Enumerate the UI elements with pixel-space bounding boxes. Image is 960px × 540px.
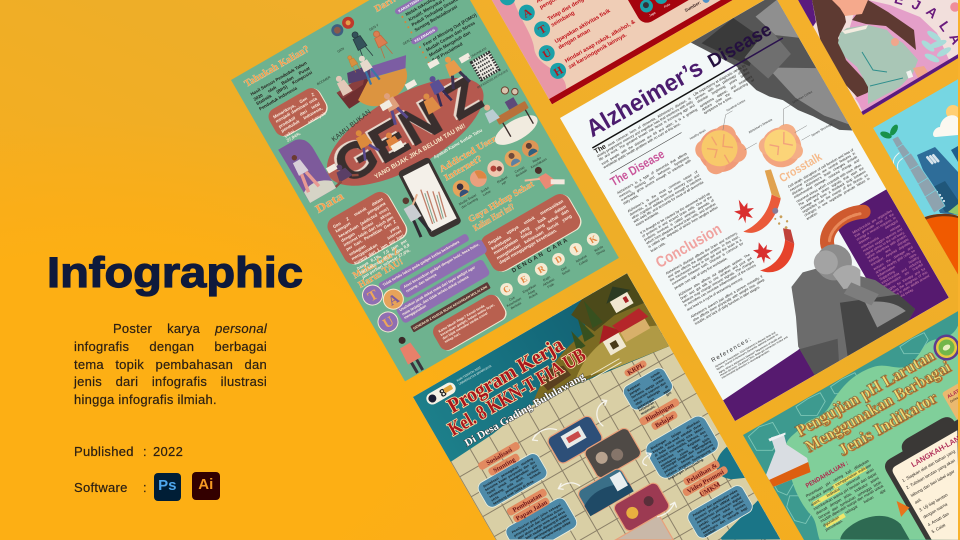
main ellipse — [311, 57, 499, 207]
text: box Sosialisasi: Sosialisasi pencegahan stunting bersama kader posyandu dan ibu hamil untuk mengenalkan gizi seimbang, pola asuh, sanitasi, serta pemantauan tumbuh kembang anak balita di desa. — [482, 457, 542, 506]
text: disease column — [616, 152, 719, 253]
text: pendahuluan: Penentuan pH sering kali dilakukan indikator dengan menggunakan indikator alami. Indikator universal akan memberikan warna pH larutan dan dapat diamati dengan jelas. Indikator alami berasal dari tumbuhan sehingga lebih mudah diperoleh warga dan murah untuk digunakan sebagai bahan ajar percobaan. — [805, 458, 887, 532]
text: conclusion column — [665, 231, 765, 326]
CERDIK circles: E — [519, 273, 529, 285]
building rear — [951, 146, 958, 162]
tag: kelemahan — [410, 25, 439, 45]
phone with chart — [397, 156, 462, 238]
CERDIK labels: Cek — [508, 295, 516, 302]
text: conclusion column: Alzheimer's doesn't just affect a person mentally, it also affects them physically with weight loss, sleep trouble, and lack of daily function in later stages. — [690, 274, 765, 326]
CERDIK labels: Cukup — [578, 258, 589, 266]
blue boxes — [470, 360, 757, 540]
heading: The Disease: The Disease — [608, 147, 667, 189]
poster content — [413, 274, 780, 540]
bottom strip — [861, 53, 960, 118]
software row: : — [143, 480, 147, 495]
icon circles — [450, 137, 542, 200]
list text: Self Proclaimed — [431, 41, 464, 63]
org label: KKN-TEMATIK 2022 — [456, 365, 482, 383]
box text: Pembuatan: persimpangan utama desa — [533, 517, 570, 540]
text: intro: Hasil Sensus Penduduk Tahun 2020 oleh Badan Pusat Statistik (BPS) Komposisi Penduduk Indonesia — [250, 60, 313, 111]
list text: Senang Berkolaborasi — [414, 4, 458, 33]
neuron healthy — [722, 168, 795, 238]
title: Infographic — [47, 250, 303, 297]
flame — [896, 501, 910, 517]
person with phone — [394, 333, 427, 375]
title: Jenis Indikator — [834, 388, 940, 460]
logo — [934, 334, 958, 360]
person at phone — [399, 191, 437, 238]
pie labels: BOOMER — [316, 75, 332, 86]
heading: Data: Data — [314, 190, 346, 216]
icon labels: Radiasi — [496, 175, 508, 184]
letters: gejala: A — [923, 3, 941, 22]
poster artwork — [492, 0, 732, 104]
heading: Tahukah Kalian: Tahukah Kalian? — [243, 44, 311, 90]
CERDIK circles: K — [588, 233, 599, 245]
text: purple panel: Mitochondria are organelles that generate most of the energy a neuron requires. In disease, damaged mitochondria release reactive oxygen species and signal stress to the cell body, which interferes with protein folding and disrupts transport. Amyloid deposits worsen the damage and activate nearby glial cells, so inflammation rises. Supporting healthy mitochondria and reducing inflammation are hopeful targets for therapy and for slowing the progress of this illness in older adults around the world today. — [852, 209, 930, 303]
scattered particles — [769, 205, 791, 232]
sun — [946, 105, 960, 119]
brain labels: Shrunken Cortex — [791, 89, 813, 104]
building main — [917, 147, 958, 215]
published row: 2022 — [153, 444, 183, 459]
heading: pendahuluan: PENDAHULUAN : — [805, 460, 850, 490]
box text: Pembuatan: Pembuatan papan jalan sebagai — [511, 503, 562, 534]
steps list — [902, 450, 956, 533]
hills — [532, 274, 669, 404]
pie labels: GEN Y — [368, 23, 380, 32]
body paragraph: infografis dengan berbagai — [74, 339, 267, 354]
body top — [838, 25, 918, 104]
TAU circles: T — [365, 287, 382, 305]
published row — [74, 444, 183, 459]
icon labels: Cemas — [514, 165, 525, 174]
highlights — [812, 466, 867, 528]
icon labels: HP — [501, 180, 508, 186]
poster content — [744, 314, 960, 540]
icon labels: Media Sosial — [458, 193, 477, 206]
body paragraph: jenis dari infografis ilustrasi — [74, 374, 267, 389]
pink wave — [488, 0, 570, 99]
icon: Illustrator — [192, 472, 220, 500]
action list: dengan aman — [557, 27, 592, 51]
list text: Mudah Mengeluh dan — [428, 30, 471, 58]
text: callout: Kamu Masih Ragu? Kenali tanda kecanduan gadget, batasi waktu layar, dan bijak memakai media sosial setiap hari. — [438, 303, 495, 344]
heading: addicted — [437, 133, 503, 183]
poster artwork — [582, 0, 949, 421]
salmon tags — [478, 360, 728, 522]
subtitle: Di Desa Gading Bululawang — [463, 371, 588, 449]
panel labels: Jaga — [648, 11, 657, 18]
steps list: 4. Amati dan — [927, 511, 950, 527]
speech bubbles — [306, 43, 486, 174]
text: lifestyle pill: Segala upaya untuk memastikan kehidupan yang baik dalam menciptakan hidup yang sehat dan menghindari kebiasaan buruk yang dapat mengganggu kesehatan. — [487, 199, 572, 265]
text: box KRPL: Kegiatan rumah pangan lestari bersama warga untuk menanam sayuran dan obat keluarga di pekarangan agar kebutuhan gizi terpenuhi. — [627, 371, 672, 416]
lifestyle pill — [477, 190, 585, 276]
chimney — [892, 136, 945, 213]
poster: Gen Z green — [231, 0, 619, 381]
pie chart — [331, 43, 422, 122]
title: Disease — [704, 19, 776, 72]
tag labels: Sosialisasi — [485, 447, 514, 467]
title: Menggunakan Berbagai — [801, 357, 954, 456]
tag labels: Bimbingan — [645, 402, 675, 423]
tag labels — [486, 363, 724, 521]
red panel — [615, 0, 755, 26]
TAUH circles: T — [536, 23, 549, 37]
icon labels — [458, 154, 548, 210]
body paragraph: tema topik pembahasan dan — [74, 357, 267, 372]
title: Kel. 8 KKN-T FIA UB — [444, 344, 590, 441]
subtitle: YANG BIJAK JIKA BELUM TAU INI! — [373, 123, 467, 181]
logo pill — [426, 382, 456, 404]
steps list: 3. Uji tiap larutan — [918, 492, 949, 513]
hexagon pattern — [748, 332, 928, 524]
text: disease column: It is thought to be caused by the abnormal build-up of proteins in and around brain cells. One of the proteins involved is called amyloid, deposits of which form plaques around brain cells, and another is called tau, deposits of which form tangles within brain cells. — [639, 191, 719, 253]
TAUH circles: U — [541, 47, 554, 61]
teal corner — [716, 446, 780, 540]
tag labels: Belajar — [654, 413, 676, 430]
TAU circles: U — [381, 314, 397, 332]
icon: Photoshop — [154, 473, 181, 500]
steps list: dengan warna — [922, 501, 949, 520]
sleeve lines — [862, 52, 903, 86]
torn photo — [691, 0, 852, 178]
skirt — [855, 93, 867, 108]
list text: Fear of Missing Out (FOMO) — [422, 12, 478, 47]
purple bars — [378, 228, 499, 326]
TAU circles — [359, 273, 416, 336]
QR labels: REFERENSI AKTIVITAS — [476, 69, 509, 90]
heading: maka gen z: Harus TAU! — [357, 257, 405, 291]
steps list: 1. Siapkan alat dan bahan yang — [901, 448, 956, 483]
brain labels: Alzheimer's Disease — [748, 117, 773, 134]
man overlay — [792, 244, 915, 375]
icon labels: Berlebih — [515, 168, 528, 178]
leaves — [879, 123, 900, 140]
right edge strip — [958, 0, 960, 540]
brain labels: Severe Shrinkage — [810, 122, 833, 137]
CERDIK labels: Enyahkan — [522, 283, 537, 294]
flask — [766, 432, 811, 487]
text: box Pelatihan: Pelatihan dan pembuatan video promosi produk UMKM untuk memperluas pemasaran digital pelaku usaha lokal melalui media sosial dengan konten sederhana dan menarik bagi pembeli. — [692, 489, 748, 538]
poster paper — [743, 310, 960, 540]
body paragraph: Poster karya personal — [113, 321, 267, 336]
heading: References: References: — [711, 336, 753, 364]
text: box Bimbingan: Bimbingan belajar diberikan kepada anak-anak sekolah dasar di balai desa setiap sore. Materi meliputi matematika, bahasa, dan kreativitas seni. Kegiatan ini membantu siswa agar lebih semangat belajar dan mengulang pelajaran bersama mahasiswa selama program berlangsung di lingkungan Desa Gading. — [650, 419, 716, 481]
text: data pill: Gen Z masuk dalam kategori pengguna kecanduan (addicted user) dengan durasi akses internet lebih dari tujuh jam per hari. Penelitian Gen Z sebagian yang menggunakan internet kurang dari 1 jam per hari hanya 8,1%, 7,5 jam per hari sebesar 30,7%, dan 8,9 jam perhari sebesar 27,6%. — [332, 196, 411, 280]
CERDIK labels: Kesehatan — [506, 296, 522, 308]
smoke lines — [893, 152, 906, 170]
fence — [591, 359, 621, 379]
orange mound — [923, 214, 958, 275]
title: Pengujian pH Larutan — [792, 345, 938, 440]
sky — [873, 78, 960, 278]
collar — [842, 25, 868, 34]
dark bottom shape — [840, 516, 910, 540]
body paragraph — [74, 321, 268, 407]
CERDIK labels: Istirahat — [575, 254, 588, 264]
heading: gaya hidup: Kalian Hari ini? — [471, 201, 516, 233]
CERDIK labels: Aktivitas — [542, 277, 555, 287]
heading: langkah: LANGKAH-LAN — [909, 434, 960, 469]
alat box: Gelas — [949, 396, 959, 404]
steps list: tabung dan beri label agar — [910, 468, 956, 498]
box text: Pembuatan: agar akses warga serta tamu desa — [517, 510, 566, 540]
list text: Mudah Cemas dan Stress — [425, 20, 476, 53]
text: disease column: Alzheimer's is a type of dementia that affects memory, thinking and behavior. Symptoms eventually grow severe enough to interfere with daily tasks. — [616, 152, 692, 206]
text: intro pill: Menariknya, Gen Z menjadi dominasi usia produktif dari total penduduk Indonesia, yakni sebanyak 27,94%. — [272, 92, 326, 143]
woman pointing — [522, 159, 565, 199]
list text — [405, 0, 488, 63]
body paragraph: hingga infografis ilmiah. — [74, 392, 217, 407]
CERDIK labels: Sehat — [561, 268, 571, 276]
TAUH circles: A — [521, 6, 534, 21]
title — [444, 340, 586, 438]
TAU circles: A — [386, 291, 403, 310]
letters: gejala — [893, 0, 960, 47]
icon: Illustrator: Ai — [198, 476, 213, 493]
CERDIK circles: R — [536, 263, 547, 275]
callout pill — [430, 291, 510, 354]
action list: zat karsinogenik lainnya. — [568, 32, 628, 71]
text: crosstalk column: Cell death, disruption of cell function and loss of neuronal connections are central features in disease. Alzheimer's brain changes include mitochondrial damage, reduced energy, and neuronal stress which crosstalk with each other. The pathways share signals that start the damage and form a feedback loop between organelles over the course of the illness, so changes in one organelle promote failure in another. — [787, 148, 871, 221]
CERDIK labels: Fisik — [547, 282, 555, 289]
CERDIK circles: C — [501, 283, 512, 295]
CERDIK labels: Kelola — [594, 245, 604, 253]
text: conclusion column: Alzheimer's disease affects the brain and memory, and also effects the digestive system. In this case, the mechanism found in the gut and the brain is a connection between both. Disease is common for people over age of sixty five worldwide. — [665, 231, 744, 290]
TAUH circles: H — [552, 64, 566, 79]
CERDIK circles: D — [553, 253, 564, 265]
hands — [891, 38, 928, 78]
CERDIK labels: Diet — [560, 266, 568, 272]
rotated layer — [413, 274, 780, 540]
CERDIK labels: Rokok — [528, 291, 539, 300]
title — [582, 15, 776, 143]
green blob — [786, 326, 958, 540]
QR labels — [461, 43, 509, 90]
dark banner: GENERASI Z HARUS BIJAK KEUANGAN MULAI KINI — [413, 285, 488, 331]
figure at desk — [474, 80, 542, 151]
left panel — [47, 250, 303, 501]
CERDIK labels: Asap — [527, 289, 536, 296]
tag labels: Stunting — [492, 456, 517, 475]
pie labels — [306, 12, 413, 93]
clipboard — [885, 417, 958, 540]
man holding head — [762, 223, 919, 375]
text: disease column: Alzheimer's is the most common cause of dementia, a general term for memory loss and other cognitive abilities serious enough to interfere with daily life, and accounts for most of all dementia cases worldwide. — [627, 170, 704, 228]
box text: Pembuatan: penunjuk arah dan identitas dusun — [513, 506, 564, 538]
mitochondrion — [819, 207, 869, 245]
tag labels: UMKM — [699, 481, 722, 498]
text: conclusion column: Alzheimer also affects our digestion system. The brain and gut talk to one another and poor gut balance may change immune signals. The changes in microbes can increase inflammation of the nerves and lead to a cycle of worsening memory. — [678, 253, 757, 312]
published row: : — [143, 444, 147, 459]
text: purple bar 2: Atasi kecanduan gadget dengan hobi, baca buku, renang, dan lainnya — [403, 242, 480, 293]
tag labels: Pelatihan & — [686, 462, 719, 485]
heading: Crosstalk: Crosstalk — [777, 149, 825, 185]
text: intro left: The most common form of dementia, Alzheimer's disease, is slowly progressive memory and cognition loss that interferes with daily life and work. The greatest known risk factor is increasing age and most people with the disease are 65 and older; it is a growing worldwide public health problem with no cure at this time. — [593, 96, 698, 169]
bottom strip — [549, 0, 766, 104]
text: purple bar 3: Usahakan jarak dekat mata dari layar gadget agar mata terjaga, dan tidak terlalu dekat selama menggunakan — [399, 265, 476, 320]
action list: Hindari asap rokok, alkohol, & — [564, 19, 637, 64]
heading: addicted: Internet? — [442, 153, 484, 183]
brain labels: Cerebral Cortex — [726, 98, 746, 112]
healthy brain — [690, 119, 751, 181]
tag labels: Pembuatan — [512, 492, 543, 514]
icon: Photoshop: Ps — [158, 477, 176, 494]
top circle — [950, 2, 960, 12]
rotated layer — [744, 314, 960, 540]
icon labels: Kecelakaan — [530, 157, 548, 169]
icon labels: Risiko — [532, 156, 542, 164]
neuron diseased — [748, 225, 805, 278]
QR code — [470, 51, 500, 81]
logo pill: 8 — [438, 387, 449, 400]
trees — [571, 301, 603, 349]
poster background — [798, 0, 960, 115]
poster artwork — [743, 311, 958, 540]
pie labels: GEN — [337, 46, 345, 54]
icon labels: Sudut — [480, 186, 490, 194]
QR labels: KOMUNIKASI — [468, 46, 487, 60]
leaves — [920, 29, 952, 64]
photo details — [560, 426, 654, 519]
title: Program Kerja — [443, 332, 568, 418]
tag labels: KRPL — [626, 361, 646, 377]
heading: gaya hidup: Gaya Hidup Sehat — [466, 179, 535, 224]
poster artwork — [413, 273, 781, 540]
purple left strip — [798, 0, 816, 28]
action list — [531, 0, 640, 71]
label: Kamu bukan: KAMU BUKAN — [331, 108, 373, 144]
source: Sumber: — [684, 0, 702, 13]
figures on letters — [307, 53, 482, 188]
steps list: asli. — [914, 497, 923, 505]
grid — [413, 273, 781, 540]
CERDIK labels: Berkala — [510, 301, 522, 310]
face — [832, 0, 868, 16]
software row: Software — [74, 480, 128, 495]
poster artwork — [243, 0, 606, 374]
text: intro right: Life expectancy at diagnosis varies by person, with the pathology of the disease beginning years before symptoms appear, and treatment options slow the worsening of symptoms for a time. — [692, 63, 755, 115]
text: purple bar 1: Tidak terlalu fokus pada gadget ketika berkendara — [382, 240, 460, 287]
poster: factory — [873, 78, 960, 278]
icon labels: Lehar — [482, 189, 492, 197]
heading: addicted: Addicted User — [437, 133, 498, 174]
mound rim — [923, 214, 958, 220]
title rule — [592, 37, 783, 149]
data pill — [324, 188, 411, 269]
window stripes — [926, 154, 945, 202]
CERDIK circles — [498, 231, 602, 298]
poster: woman — [798, 0, 960, 118]
heading: Apakah kamu sudah tahu: Apakah Kamu Sudah Tahu — [433, 127, 483, 160]
CERDIK labels — [504, 245, 608, 312]
green hill — [948, 204, 958, 215]
diseased brain — [754, 119, 809, 175]
heading: Conclusion: Conclusion — [653, 221, 725, 272]
steps list: 2. Tuliskan larutan yang akan — [905, 458, 957, 490]
brain labels — [686, 66, 833, 191]
tag labels: Papan Jalan — [515, 499, 549, 523]
published row: Published — [74, 444, 134, 459]
pie labels: GEN Z — [402, 37, 413, 46]
poster paper — [413, 273, 781, 540]
box text: Pembuatan: lebih mudah, dipasang di setiap — [525, 513, 568, 540]
arrows — [532, 399, 677, 518]
brain labels: Healthy Brain — [689, 128, 707, 141]
logos — [329, 15, 357, 38]
purple panel — [672, 189, 949, 421]
tag: kelemahan: KELEMAHAN — [414, 28, 436, 43]
brain annotation lines — [717, 82, 812, 172]
panel icons — [638, 0, 670, 15]
action list: seimbang — [550, 10, 576, 29]
letters: gejala: L — [936, 18, 954, 35]
org label: UNIVERSITAS BRAWIJAYA — [458, 364, 492, 386]
alat box — [942, 384, 958, 420]
thin rule — [610, 132, 682, 174]
source icon — [701, 0, 711, 4]
tag: karakteristik — [394, 0, 428, 15]
intro pill — [265, 84, 331, 140]
CERDIK labels: Stress — [595, 248, 606, 256]
list bullets — [401, 15, 430, 64]
CERDIK circles: I — [572, 244, 580, 254]
panel labels: Pola — [663, 2, 671, 9]
label: dengan cara: DENGAN CARA — [511, 237, 570, 274]
cloud — [933, 115, 958, 137]
CERDIK labels: Rajin — [542, 275, 551, 282]
figures on pie — [318, 20, 401, 100]
building front — [931, 181, 958, 212]
purple arch panel — [278, 134, 336, 203]
big letters GEN Z: GEN Z — [325, 66, 491, 195]
steps list: 5. Catat — [931, 522, 947, 534]
title: Alzheimer’s — [582, 54, 708, 143]
panel labels — [648, 0, 687, 18]
hair — [812, 0, 916, 100]
TAUH circles — [497, 0, 575, 85]
poster: Program Kerja — [413, 273, 781, 540]
poster: pink CERDIK top — [378, 0, 766, 104]
box text: Pembuatan: bersama warga sekitar — [541, 520, 572, 540]
box text: Pembuatan — [511, 503, 572, 540]
house main — [599, 308, 650, 356]
house top — [606, 286, 634, 314]
poster: Alzheimer's Disease — [560, 0, 949, 421]
poster: pH Larutan — [743, 311, 958, 540]
photos — [548, 416, 674, 540]
icon labels: dan Gaming — [461, 197, 479, 210]
text: references: Alzheimer's Association. 2022 Alzheimer's disease facts and figures. Journal of Alzheimer's Dementia. National Institute on Aging. What is Alzheimer's Disease? Department of Health and Human Services. Cleveland Clinic. Brain-gut connection review and mitochondrial dysfunction in neurodegeneration. — [715, 331, 788, 380]
tag labels: Video Promosi — [686, 469, 725, 495]
action list: Upayakan aktivitas fisik — [554, 8, 612, 45]
sky band — [413, 274, 669, 470]
pink ring — [840, 0, 950, 118]
heading: maka gen z: Maka, Gen Z — [351, 247, 401, 281]
